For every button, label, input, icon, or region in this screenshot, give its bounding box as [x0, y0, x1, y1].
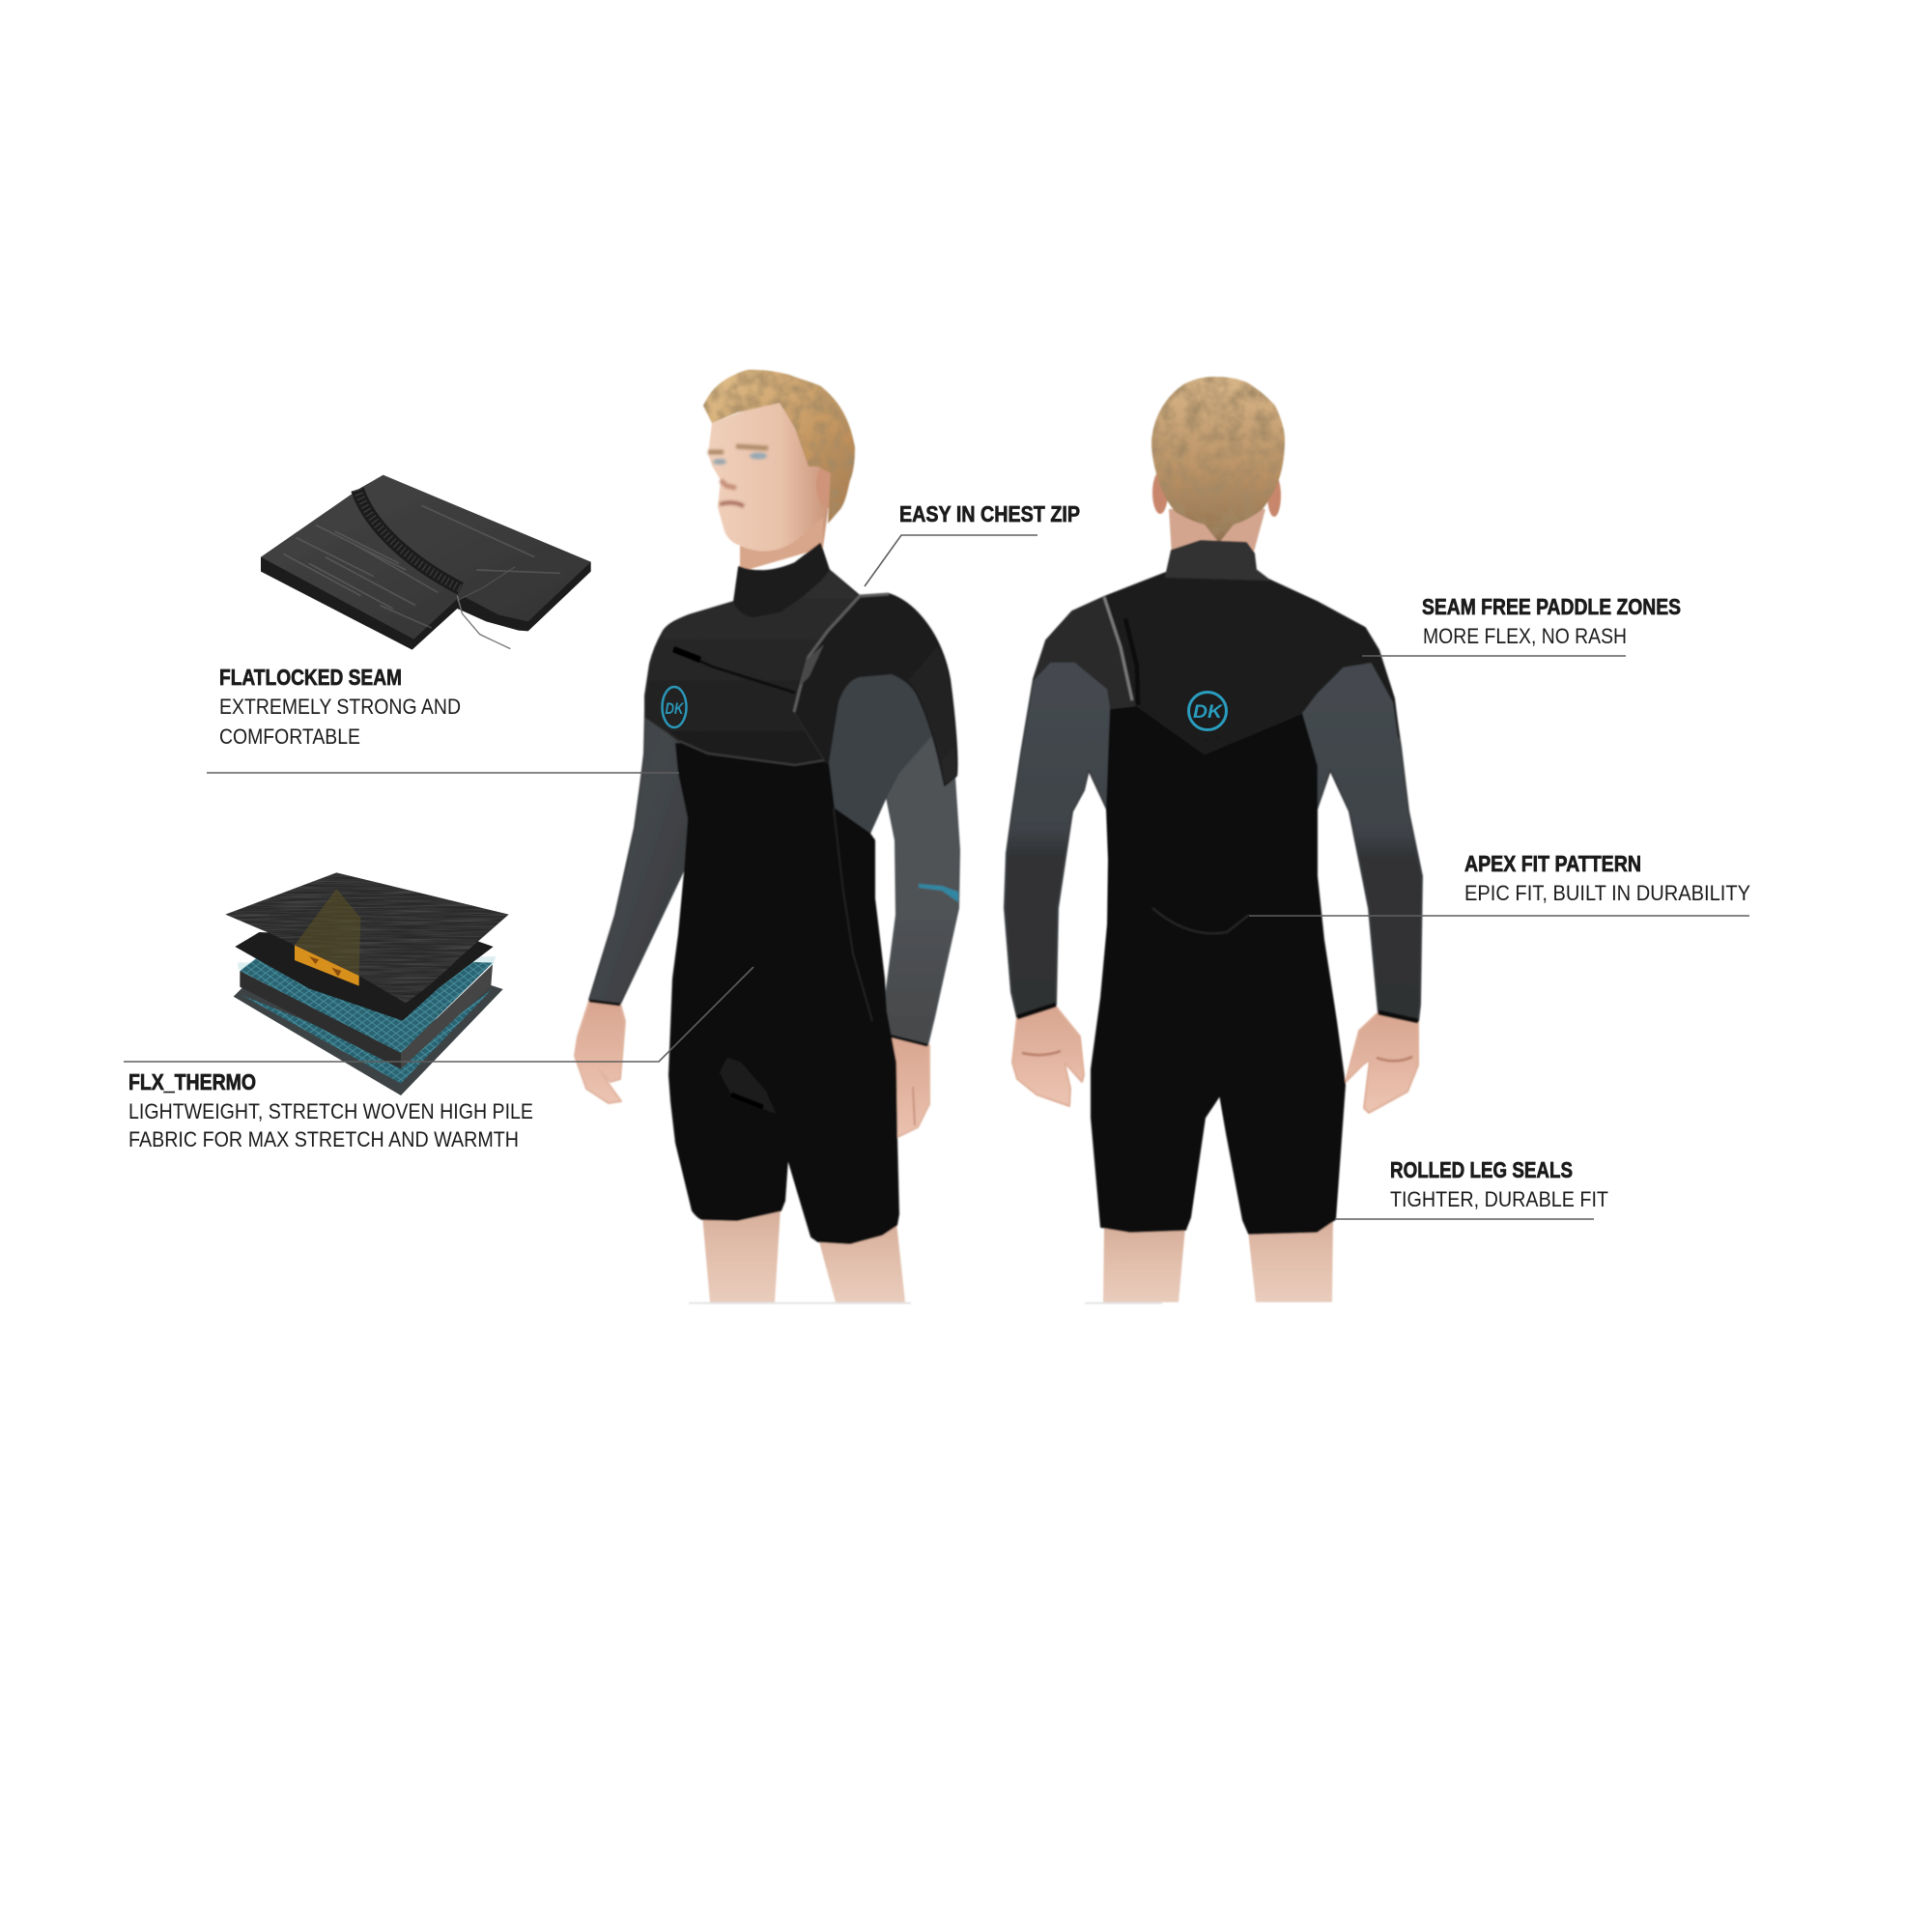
text block: flatlocked seam: COMFORTABLE	[219, 724, 360, 749]
text block: FLX thermo	[128, 1069, 533, 1151]
text block: apex fit pattern: EPIC FIT, BUILT IN DURABILITY	[1464, 881, 1750, 905]
callout line: apex fit pattern	[1249, 915, 1749, 917]
text block: seam free paddle zones: MORE FLEX, NO RASH	[1423, 624, 1627, 648]
icon: front chest logo	[663, 687, 686, 727]
text block: seam free paddle zones	[1422, 594, 1681, 648]
callout line: easy in chest zip	[865, 535, 1037, 586]
callout line: flatlocked seam	[207, 772, 679, 774]
text block: rolled leg seals: ROLLED LEG SEALS	[1390, 1157, 1573, 1182]
text block: flatlocked seam	[219, 665, 461, 749]
text block: FLX thermo: LIGHTWEIGHT, STRETCH WOVEN HIGH PILE	[128, 1099, 533, 1123]
callout line: rolled leg seals	[1335, 1218, 1594, 1220]
figure: front view model in wetsuit	[575, 370, 959, 1303]
swatch: FLX thermo layered fabric	[225, 872, 509, 1095]
callout line: FLX thermo	[124, 967, 753, 1062]
icon: back logo	[1188, 692, 1227, 730]
text block: flatlocked seam: EXTREMELY STRONG AND	[219, 695, 461, 719]
text block: flatlocked seam: FLATLOCKED SEAM	[219, 665, 402, 690]
text block: apex fit pattern	[1464, 851, 1750, 905]
figure: back view model in wetsuit	[1005, 377, 1422, 1303]
text block: FLX thermo: FLX_THERMO	[128, 1069, 256, 1094]
text block: seam free paddle zones: SEAM FREE PADDLE ZONES	[1422, 594, 1681, 619]
icon: front chest logo: DK	[665, 699, 685, 718]
text block: rolled leg seals	[1390, 1157, 1608, 1211]
text block: easy in chest zip: EASY IN CHEST ZIP	[899, 501, 1080, 526]
icon: back logo: DK	[1193, 702, 1223, 723]
text block: FLX thermo: FABRIC FOR MAX STRETCH AND WARMTH	[128, 1127, 519, 1151]
callout line: seam free paddle zones	[1362, 655, 1626, 657]
swatch: flatlocked seam material	[261, 475, 591, 650]
text block: apex fit pattern: APEX FIT PATTERN	[1464, 851, 1641, 876]
text block: rolled leg seals: TIGHTER, DURABLE FIT	[1390, 1187, 1608, 1211]
